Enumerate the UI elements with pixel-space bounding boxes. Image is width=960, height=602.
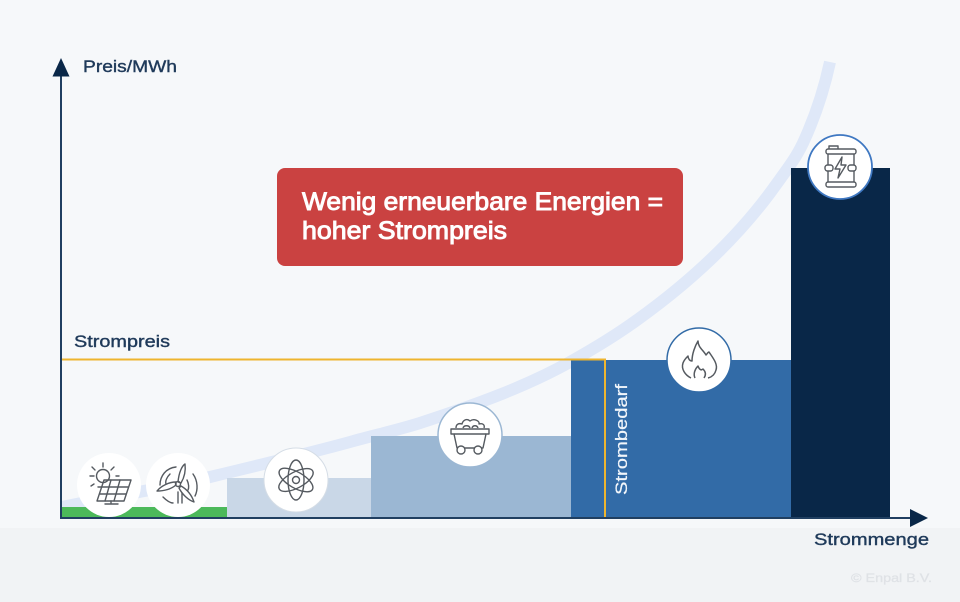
demand label: Strombedarf: [612, 384, 631, 495]
callout: [277, 168, 683, 266]
icon: solar panel and sun: [77, 453, 141, 517]
bar: oil: [791, 168, 890, 518]
merit order curve: [62, 62, 830, 507]
x axis label: Strommenge: [814, 530, 929, 549]
callout: Wenig erneuerbare Energien =: [302, 188, 663, 216]
price label: Strompreis: [74, 332, 170, 351]
callout: hoher Strompreis: [302, 217, 507, 245]
bar: gas: [571, 360, 791, 518]
copyright: © Enpal B.V.: [851, 571, 932, 585]
icon: oil barrel: [808, 135, 872, 199]
y axis label: Preis/MWh: [83, 57, 177, 76]
icon: wind turbine: [146, 453, 210, 517]
price line: [61, 360, 605, 518]
bar: nuclear: [227, 478, 371, 518]
y axis: [52, 58, 70, 519]
icon: atom: [264, 448, 328, 512]
icon: coal cart: [438, 403, 502, 467]
icon: gas flame: [667, 328, 731, 392]
x axis: [60, 509, 928, 527]
bar: renewables: [61, 507, 227, 518]
bar: coal: [371, 436, 571, 518]
